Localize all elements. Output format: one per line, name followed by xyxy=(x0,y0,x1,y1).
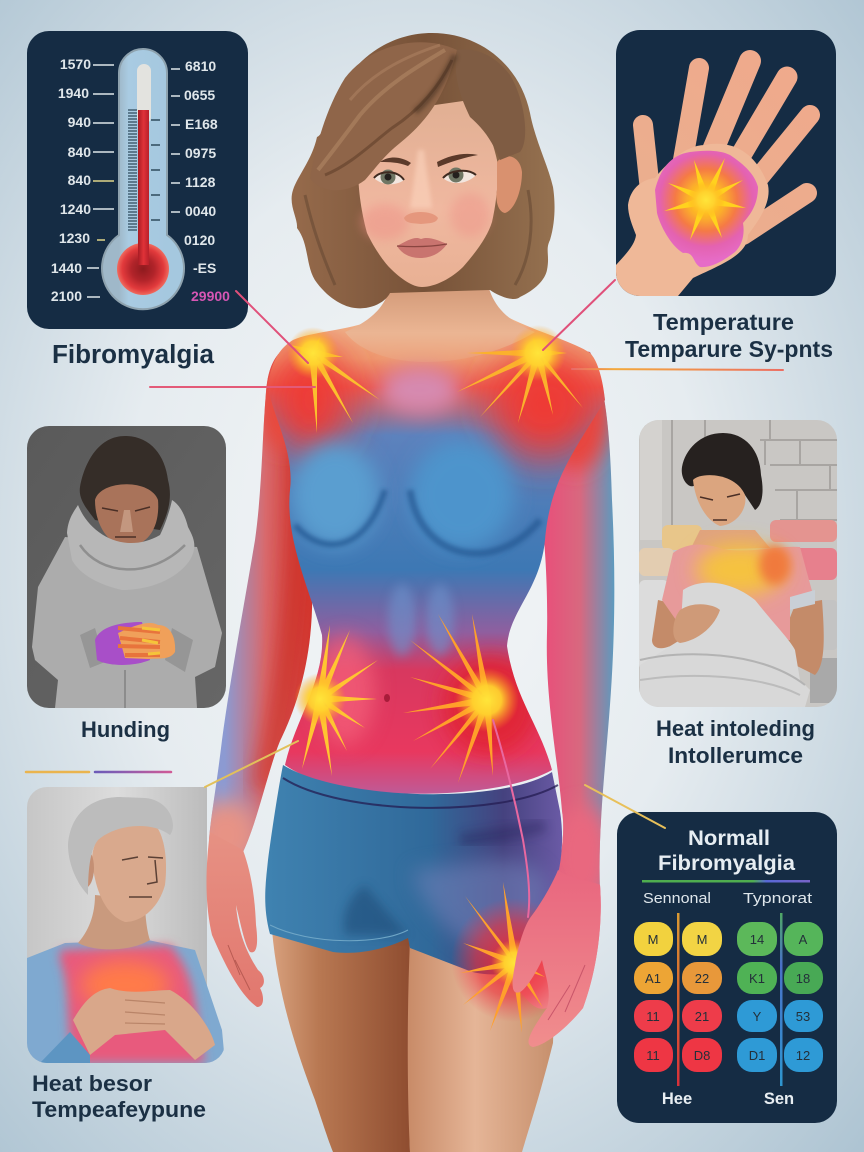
sweater xyxy=(27,940,225,1063)
panel: hand with palm heat xyxy=(616,30,836,296)
thermometer right scale: -ES xyxy=(193,260,216,276)
warm pill grid: 11 xyxy=(646,1009,660,1024)
palm starburst xyxy=(664,158,746,240)
caption: Hunding: Hunding xyxy=(81,717,170,742)
thermometer right scale: 0655 xyxy=(184,87,215,103)
front hair xyxy=(305,42,531,285)
thermometer right scale: 0975 xyxy=(185,145,216,161)
thermometer left scale: 940 xyxy=(68,114,91,130)
neck and chest skin xyxy=(345,262,535,362)
hand icon xyxy=(616,61,810,296)
thermometer left scale: 1440 xyxy=(51,260,82,276)
panel: photo, woman in scarf with discoloured hands xyxy=(27,426,226,708)
thermometer right scale xyxy=(171,58,230,304)
panel: normal vs fibromyalgia chart xyxy=(617,812,837,1123)
cool pill grid: K1 xyxy=(749,971,765,986)
back hair xyxy=(292,33,555,308)
thermometer left scale: 1940 xyxy=(58,85,89,101)
caption: Heat before temperature xyxy=(32,1071,206,1122)
blanket xyxy=(640,583,810,707)
panel: photo, older woman with hands on chest xyxy=(27,787,225,1063)
starburst: right abdomen xyxy=(403,614,519,783)
hair xyxy=(80,436,170,530)
hair xyxy=(68,797,173,895)
face xyxy=(95,484,158,547)
face xyxy=(358,100,498,287)
neck xyxy=(78,895,150,949)
warm pill grid xyxy=(634,922,722,1072)
column headings: Typnorat xyxy=(743,890,813,907)
caption: Heat intolerance xyxy=(656,716,815,768)
navel xyxy=(384,694,390,702)
panel: photo, woman in blanket xyxy=(639,420,837,707)
connector lines xyxy=(26,280,783,917)
scarf xyxy=(67,500,194,590)
thermometer left scale: 1230 xyxy=(59,230,90,246)
thermometer left scale: 1570 xyxy=(60,56,91,72)
thermometer body xyxy=(102,49,184,309)
thermometer right scale: 6810 xyxy=(185,58,216,74)
cool pill grid: D1 xyxy=(749,1048,765,1063)
column footers: Sen xyxy=(764,1090,794,1108)
cool pill grid: A xyxy=(799,932,808,947)
caption: Heat before temperature: Heat besor xyxy=(32,1071,152,1096)
facial features xyxy=(361,150,490,258)
starburst: left abdomen xyxy=(294,625,378,776)
warm pill grid: M xyxy=(697,932,707,947)
cool pill grid: 14 xyxy=(750,932,764,947)
cool pill grid: 12 xyxy=(796,1048,810,1063)
text: Temperature symptoms: Temparure Sy-pnts xyxy=(625,336,833,362)
warm pill grid: 11 xyxy=(646,1048,660,1063)
hair xyxy=(682,433,763,510)
chart title xyxy=(658,827,795,875)
face xyxy=(693,475,745,526)
warm pill grid: 22 xyxy=(695,971,709,986)
starburst: right shoulder xyxy=(457,325,583,423)
ear xyxy=(496,156,522,213)
hands xyxy=(73,988,215,1060)
shorts xyxy=(265,765,562,974)
right hand overlay xyxy=(513,870,601,1047)
central figure xyxy=(194,33,620,1152)
cool pill grid xyxy=(737,922,823,1072)
thermometer left scale: 2100 xyxy=(51,288,82,304)
panel: thermometer xyxy=(27,31,248,329)
sofa with heat tint xyxy=(639,520,837,703)
chart title: Fibromyalgia xyxy=(658,852,795,875)
heading: Fibromyalgia: Fibromyalgia xyxy=(52,341,215,369)
cool pill grid: 18 xyxy=(796,971,810,986)
warm pill grid: 21 xyxy=(695,1009,709,1024)
hands xyxy=(95,622,175,665)
thermometer left scale xyxy=(51,56,114,304)
left arm and hand xyxy=(206,352,312,1007)
thermometer right scale: 29900 xyxy=(191,288,230,304)
column footers: Hee xyxy=(662,1090,692,1108)
starburst: hip xyxy=(460,882,545,1033)
right arm and hand xyxy=(520,352,614,1046)
caption: Heat intolerance: Heat intoleding xyxy=(656,716,815,741)
warm pill grid: D8 xyxy=(694,1048,710,1063)
shirt with heat map xyxy=(662,544,815,640)
cool pill grid: 53 xyxy=(796,1009,810,1024)
torso with heat map xyxy=(269,318,605,794)
hand xyxy=(673,604,720,643)
thermometer right scale: 0040 xyxy=(185,203,216,219)
warm pill grid: A1 xyxy=(645,971,661,986)
cuff xyxy=(40,1032,90,1063)
starburst: left shoulder xyxy=(287,327,380,433)
thermometer right scale: E168 xyxy=(185,116,218,132)
legs xyxy=(272,930,556,1152)
warm pill grid: M xyxy=(648,932,658,947)
chart title: Normall xyxy=(688,827,770,850)
caption: Heat before temperature: Tempeafeypune xyxy=(32,1097,206,1122)
column headings xyxy=(643,890,813,907)
neck and arms xyxy=(690,530,770,550)
heat glow: hip xyxy=(451,898,575,1022)
cool pill grid: Y xyxy=(753,1009,762,1024)
thermometer right scale: 0120 xyxy=(184,232,215,248)
thermometer left scale: 840 xyxy=(68,144,91,160)
face xyxy=(92,819,166,922)
text: Temperature symptoms xyxy=(625,309,833,362)
thermometer right scale: 1128 xyxy=(185,174,216,190)
thermometer left scale: 1240 xyxy=(60,201,91,217)
caption: Heat intolerance: Intollerumce xyxy=(668,743,803,768)
text: Temperature symptoms: Temperature xyxy=(653,309,794,335)
column footers xyxy=(662,1090,794,1108)
palm heat blob xyxy=(655,151,758,267)
column headings: Sennonal xyxy=(643,890,711,907)
thermometer left scale: 840 xyxy=(68,172,91,188)
